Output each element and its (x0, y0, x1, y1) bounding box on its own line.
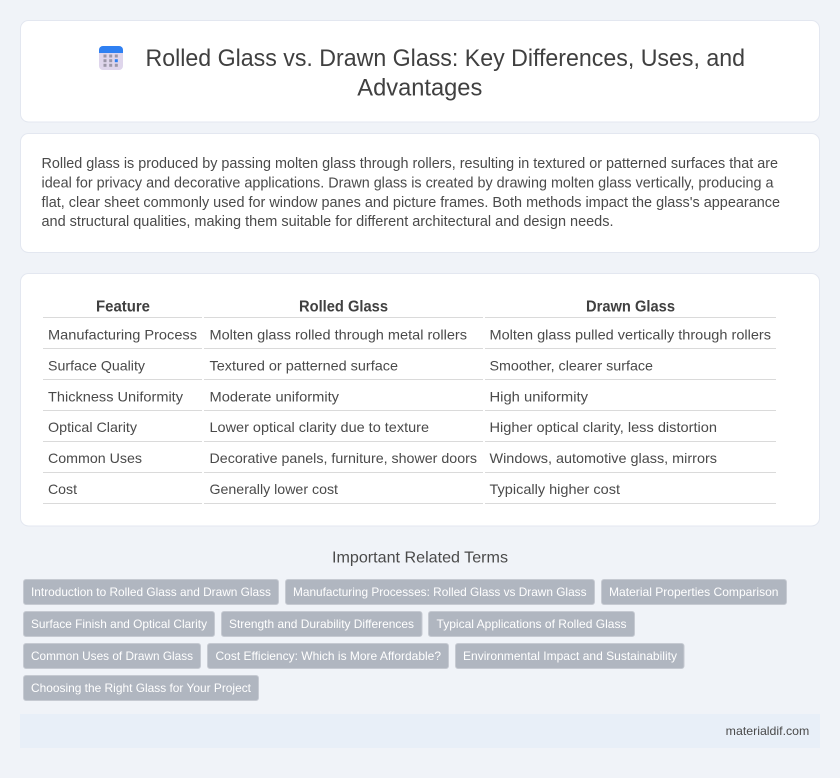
tag: common uses: Common Uses of Drawn Glass (31, 649, 193, 663)
table header row: Feature (96, 298, 150, 316)
tag: strength and durability (222, 612, 422, 636)
title: Rolled Glass vs. Drawn Glass: Key Differences, Uses, and (146, 45, 745, 72)
tag: surface finish (24, 612, 214, 636)
tag: environmental impact: Environmental Impact and Sustainability (463, 649, 677, 663)
panel: comparison table (20, 274, 820, 526)
tag: typical applications: Typical Applications of Rolled Glass (436, 617, 626, 631)
row: common uses: Windows, automotive glass, mirrors (490, 450, 717, 466)
tag: choosing the right glass (24, 676, 258, 700)
intro paragraph: flat, clear sheet commonly used for window panes and picture frames. Both methods impact the glass's appearance (42, 195, 780, 211)
related term tags (24, 580, 786, 700)
row: thickness uniformity: Thickness Uniformity (48, 388, 183, 404)
row: cost: Cost (48, 481, 77, 497)
tag: manufacturing processes: Manufacturing Processes: Rolled Glass vs Drawn Glass (293, 585, 586, 599)
intro paragraph (42, 156, 780, 230)
row: manufacturing process: Molten glass rolled through metal rollers (210, 326, 467, 342)
row: surface quality: Smoother, clearer surface (490, 357, 653, 373)
row: optical clarity: Lower optical clarity due to texture (210, 419, 429, 435)
tag: strength and durability: Strength and Durability Differences (229, 617, 414, 631)
heading: important related terms: Important Related Terms (332, 549, 508, 566)
title (146, 45, 745, 102)
row: cost: Typically higher cost (490, 481, 620, 497)
tag: typical applications (428, 612, 634, 636)
row: surface quality: Surface Quality (48, 357, 145, 373)
row: manufacturing process: Molten glass pulled vertically through rollers (490, 326, 771, 342)
tag: material properties (602, 580, 786, 604)
tag: introduction (24, 580, 278, 604)
icon: calendar (99, 46, 123, 70)
row: manufacturing process (43, 326, 776, 349)
table header row: Drawn Glass (586, 298, 675, 316)
row: thickness uniformity: High uniformity (490, 388, 588, 404)
row: common uses: Common Uses (48, 450, 142, 466)
footer (20, 714, 820, 748)
intro paragraph: ideal for privacy and decorative applications. Drawn glass is created by drawing molten glass vertically, producing a (42, 176, 774, 192)
row: surface quality (43, 357, 776, 380)
footer source text: materialdif.com (726, 724, 809, 738)
tag: choosing the right glass: Choosing the Right Glass for Your Project (31, 681, 252, 695)
tag: cost efficiency: Cost Efficiency: Which is More Affordable? (216, 649, 441, 663)
row: common uses: Decorative panels, furniture, shower doors (210, 450, 477, 466)
intro paragraph: and structural qualities, making them suitable for different architectural and design needs. (42, 214, 614, 230)
row: thickness uniformity (43, 388, 776, 411)
row: manufacturing process: Manufacturing Process (48, 326, 197, 342)
row: cost: Generally lower cost (210, 481, 338, 497)
row: thickness uniformity: Moderate uniformity (210, 388, 339, 404)
tag: surface finish: Surface Finish and Optical Clarity (31, 617, 207, 631)
row: optical clarity: Higher optical clarity, less distortion (490, 419, 717, 435)
row: optical clarity: Optical Clarity (48, 419, 137, 435)
tag: material properties: Material Properties Comparison (609, 585, 778, 599)
title: Advantages (357, 75, 482, 102)
tag: cost efficiency (208, 644, 448, 668)
table header row (43, 298, 776, 318)
panel: introduction (20, 134, 820, 252)
row: common uses (43, 450, 776, 473)
tag: common uses (24, 644, 200, 668)
row: surface quality: Textured or patterned surface (210, 357, 398, 373)
row: optical clarity (43, 419, 776, 442)
row: cost (43, 481, 776, 504)
panel: header (20, 20, 820, 122)
table header row: Rolled Glass (299, 298, 388, 316)
tag: introduction: Introduction to Rolled Glass and Drawn Glass (31, 585, 271, 599)
intro paragraph: Rolled glass is produced by passing molten glass through rollers, resulting in textured or patterned surfaces that are (42, 156, 778, 172)
tag: manufacturing processes (286, 580, 594, 604)
tag: environmental impact (456, 644, 684, 668)
